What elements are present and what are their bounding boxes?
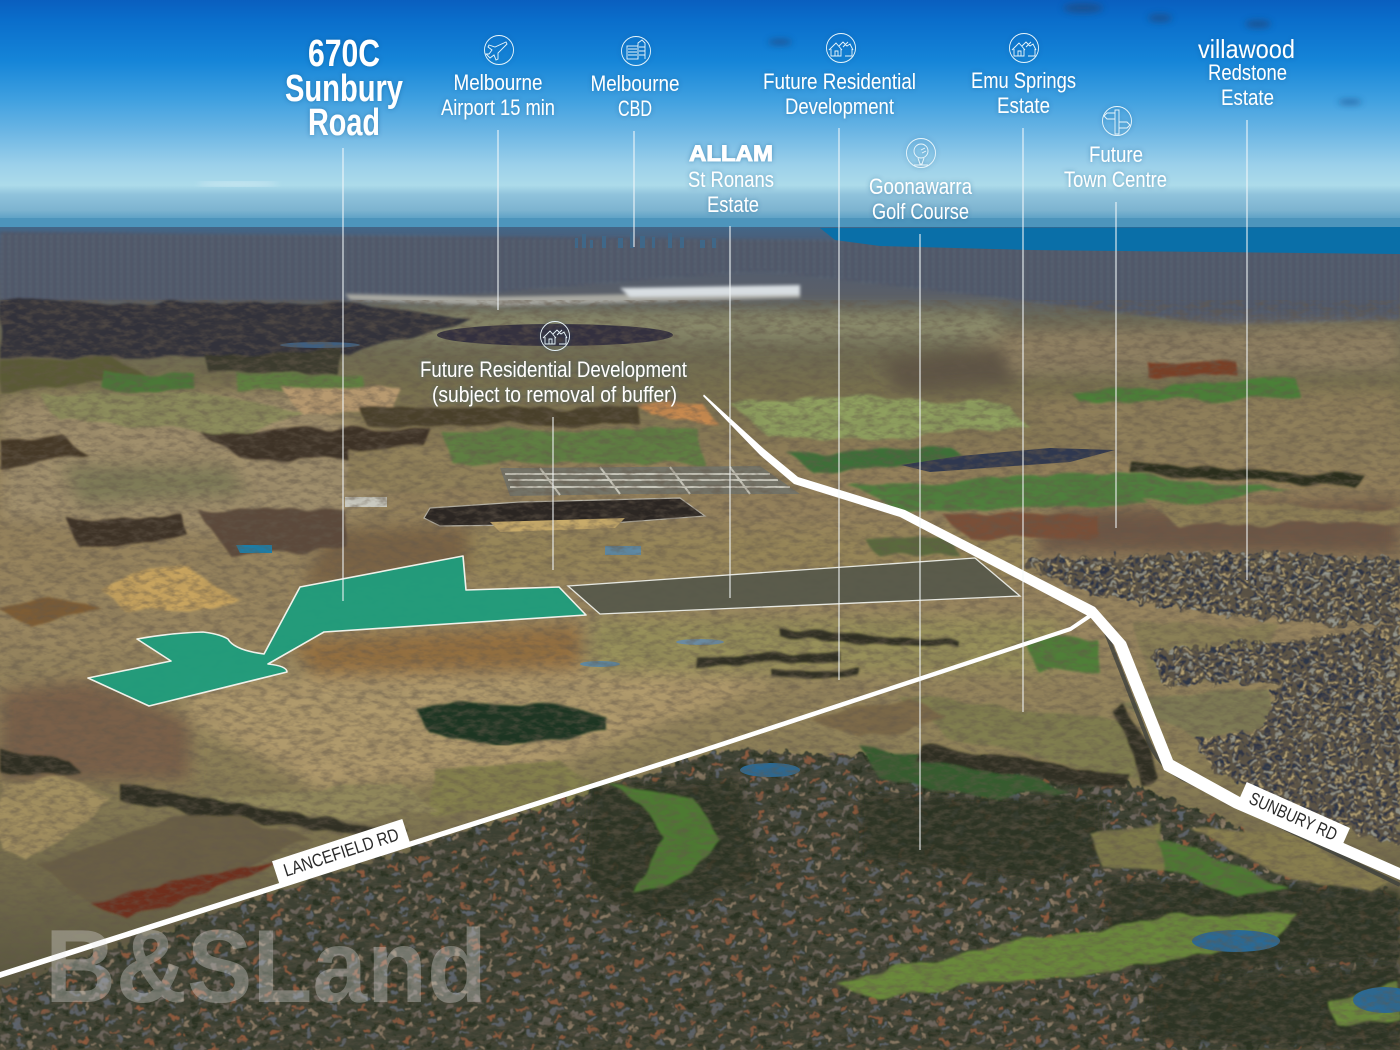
dark high clouds <box>768 3 1362 104</box>
Melbourne skyline <box>575 232 716 248</box>
crisp fields and features <box>0 302 1400 918</box>
callout: Villawood Redstone Estate: Redstone <box>1208 60 1287 85</box>
tree belts <box>0 630 1160 838</box>
dark pit <box>424 498 705 526</box>
golf course <box>610 745 1400 1025</box>
airport <box>345 285 800 306</box>
icon: city buildings <box>622 36 650 66</box>
callout: Villawood Redstone Estate: Estate <box>1221 85 1274 110</box>
subject land parcel <box>88 556 586 706</box>
road label: Lancefield Rd: LANCEFIELD RD <box>281 824 401 881</box>
adjoining grey parcel <box>568 558 1020 614</box>
logo: Villawood: villawood <box>1198 34 1295 64</box>
horizon haze band <box>0 218 1400 227</box>
callout: Melbourne CBD: CBD <box>618 96 652 121</box>
suburb south <box>0 750 1400 1050</box>
sky background <box>0 0 1400 226</box>
pine forest block <box>415 702 608 743</box>
callout: Goonawarra Golf Course: Golf Course <box>872 199 969 224</box>
icon: golf ball on tee <box>906 138 936 168</box>
icon: houses <box>1010 34 1038 62</box>
ocean on the horizon <box>820 227 1400 254</box>
roadside asphalt <box>1103 625 1400 885</box>
icon: signpost <box>1102 106 1132 136</box>
callout: Emu Springs Estate <box>971 34 1076 118</box>
callout: Emu Springs Estate: Emu Springs <box>971 68 1076 93</box>
callout: Allam St Ronans Estate <box>688 141 774 217</box>
road label: Sunbury Rd: SUNBURY RD <box>1246 788 1340 845</box>
blurred terrain zones <box>0 312 1400 790</box>
solar grid <box>500 466 800 496</box>
land tree grain <box>0 300 1400 1050</box>
callout: Future Town Centre: Future <box>1089 142 1143 167</box>
callout: Future Residential Development subject to buffer: (subject to removal of buffer) <box>432 382 677 407</box>
callout: Allam St Ronans Estate: St Ronans <box>688 167 774 192</box>
title: Sunbury <box>285 68 403 110</box>
callout: Future Residential Development subject to buffer: Future Residential Development <box>420 357 687 382</box>
icon: plane <box>484 36 514 64</box>
housing strip north <box>901 448 1115 472</box>
title <box>285 33 403 144</box>
callout: Goonawarra Golf Course <box>869 138 973 224</box>
callout: Goonawarra Golf Course: Goonawarra <box>869 174 973 199</box>
dark plantation hill <box>437 324 673 346</box>
suburb east <box>1150 625 1400 845</box>
golf course lakes <box>740 763 1400 1013</box>
land shadow mottling <box>0 300 1400 1050</box>
logo: Allam: ALLAM <box>689 141 773 166</box>
callout: Melbourne CBD <box>590 36 680 121</box>
callout: Melbourne Airport: Airport 15 min <box>441 95 555 120</box>
callout: Villawood Redstone Estate <box>1198 34 1295 110</box>
small white cloud <box>198 182 278 186</box>
south east tree cover <box>590 780 1400 1050</box>
quarry ponds and building <box>236 342 724 667</box>
road: Lancefield Road <box>0 612 1095 978</box>
title: 670C <box>308 33 380 75</box>
callout: Future Town Centre: Town Centre <box>1064 167 1167 192</box>
callout leader lines <box>343 120 1247 850</box>
distant suburbs <box>0 232 1400 325</box>
callout: Future Residential Development: Future Residential <box>763 69 916 94</box>
title: Road <box>308 102 380 144</box>
suburb north east <box>1020 552 1400 626</box>
landscape base <box>0 220 1400 1050</box>
road: Sunbury Road <box>703 394 1400 880</box>
watermark: B&S Land: B&SLand <box>45 909 487 1025</box>
icon: houses <box>540 322 570 350</box>
sand strip <box>490 518 625 532</box>
callout: Future Residential Development <box>763 34 916 119</box>
callout: Future Town Centre <box>1064 106 1167 192</box>
callout: Future Residential Development subject to buffer <box>420 322 687 407</box>
callout: Future Residential Development: Development <box>785 94 894 119</box>
callout: Melbourne CBD: Melbourne <box>590 71 680 96</box>
tree belt beside field <box>915 745 1133 790</box>
icon: houses <box>826 34 856 62</box>
callout: Melbourne Airport <box>441 36 555 120</box>
callout: Emu Springs Estate: Estate <box>997 93 1050 118</box>
callout: Melbourne Airport: Melbourne <box>454 70 542 95</box>
callout: Allam St Ronans Estate: Estate <box>707 192 759 217</box>
